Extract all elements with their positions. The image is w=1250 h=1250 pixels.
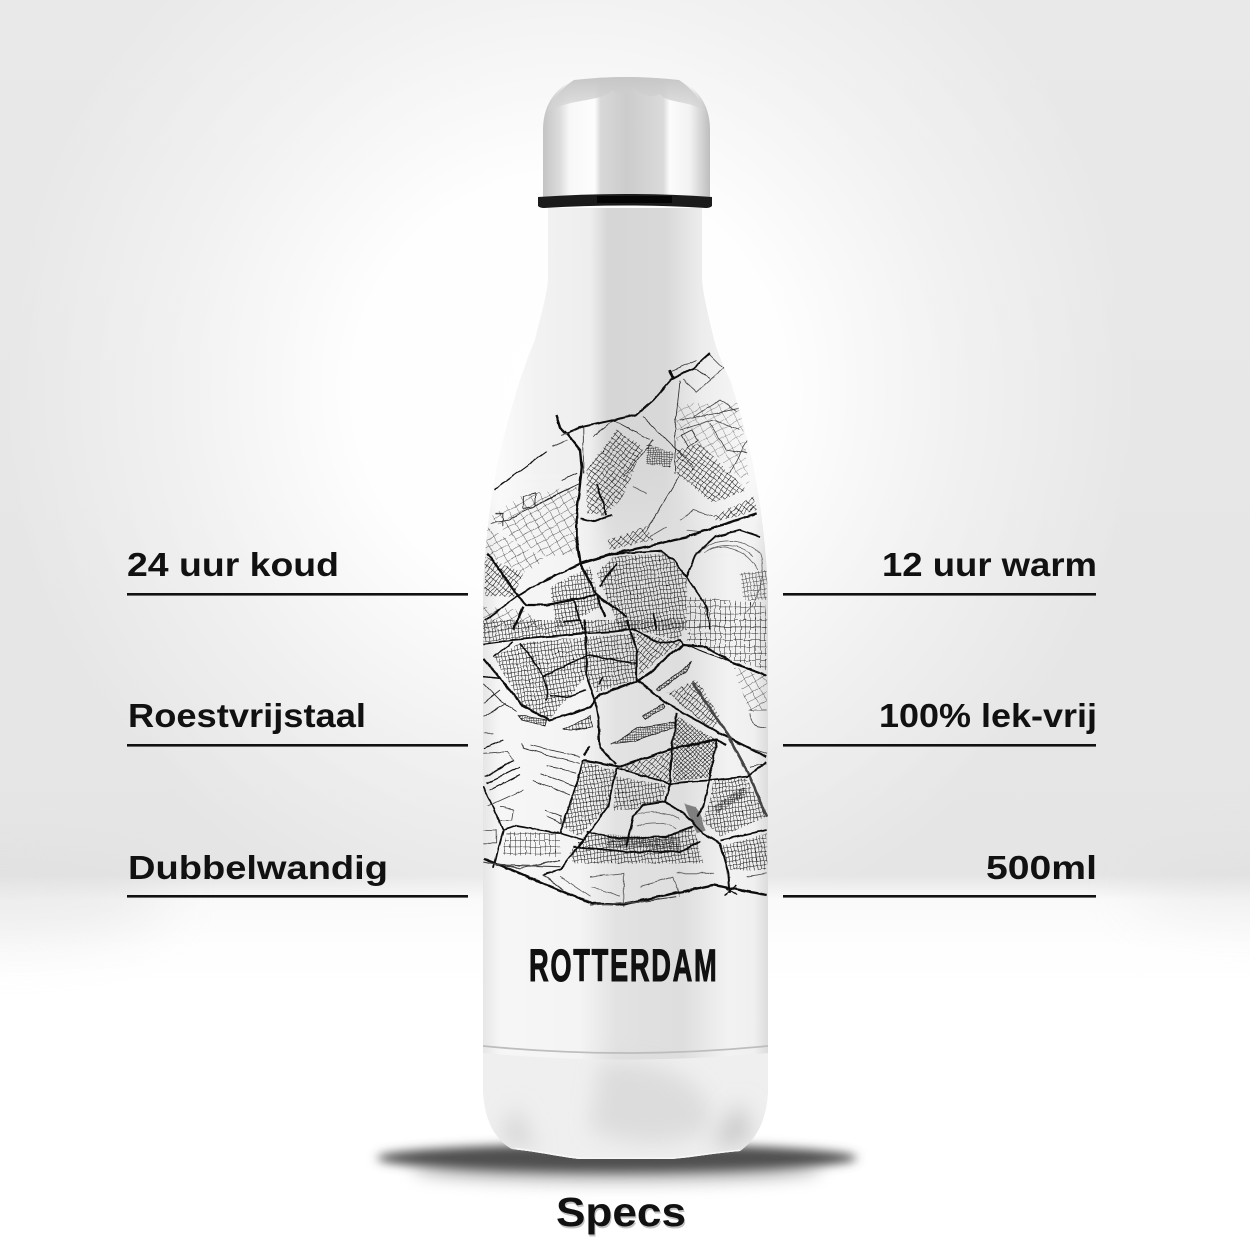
city map of Rotterdam: [483, 353, 767, 907]
north half of the map: [483, 353, 767, 630]
spec: Roestvrijstaal: Roestvrijstaal: [128, 697, 366, 734]
shadow under bottle: [377, 1144, 857, 1182]
caption: Specs: Specs: [557, 1191, 687, 1237]
caption: Specs: Specs: [556, 1189, 686, 1235]
south half of the map: [483, 620, 767, 907]
spec: 500ml: 500ml: [986, 849, 1097, 886]
cap seal ring: [538, 194, 712, 208]
base groove: [483, 1046, 768, 1053]
spec: Dubbelwandig: Dubbelwandig: [128, 849, 388, 886]
spec: 12 uur warm: 12 uur warm: [882, 546, 1097, 583]
bottle label: city name: ROTTERDAM: [529, 940, 717, 991]
bottle: [470, 77, 780, 1170]
spec: 100% lek-vrij: 100% lek-vrij: [879, 697, 1097, 734]
bottle body: [470, 200, 780, 1170]
bottle cap: [538, 77, 712, 208]
spec: 24 uur koud: 24 uur koud: [127, 546, 339, 583]
